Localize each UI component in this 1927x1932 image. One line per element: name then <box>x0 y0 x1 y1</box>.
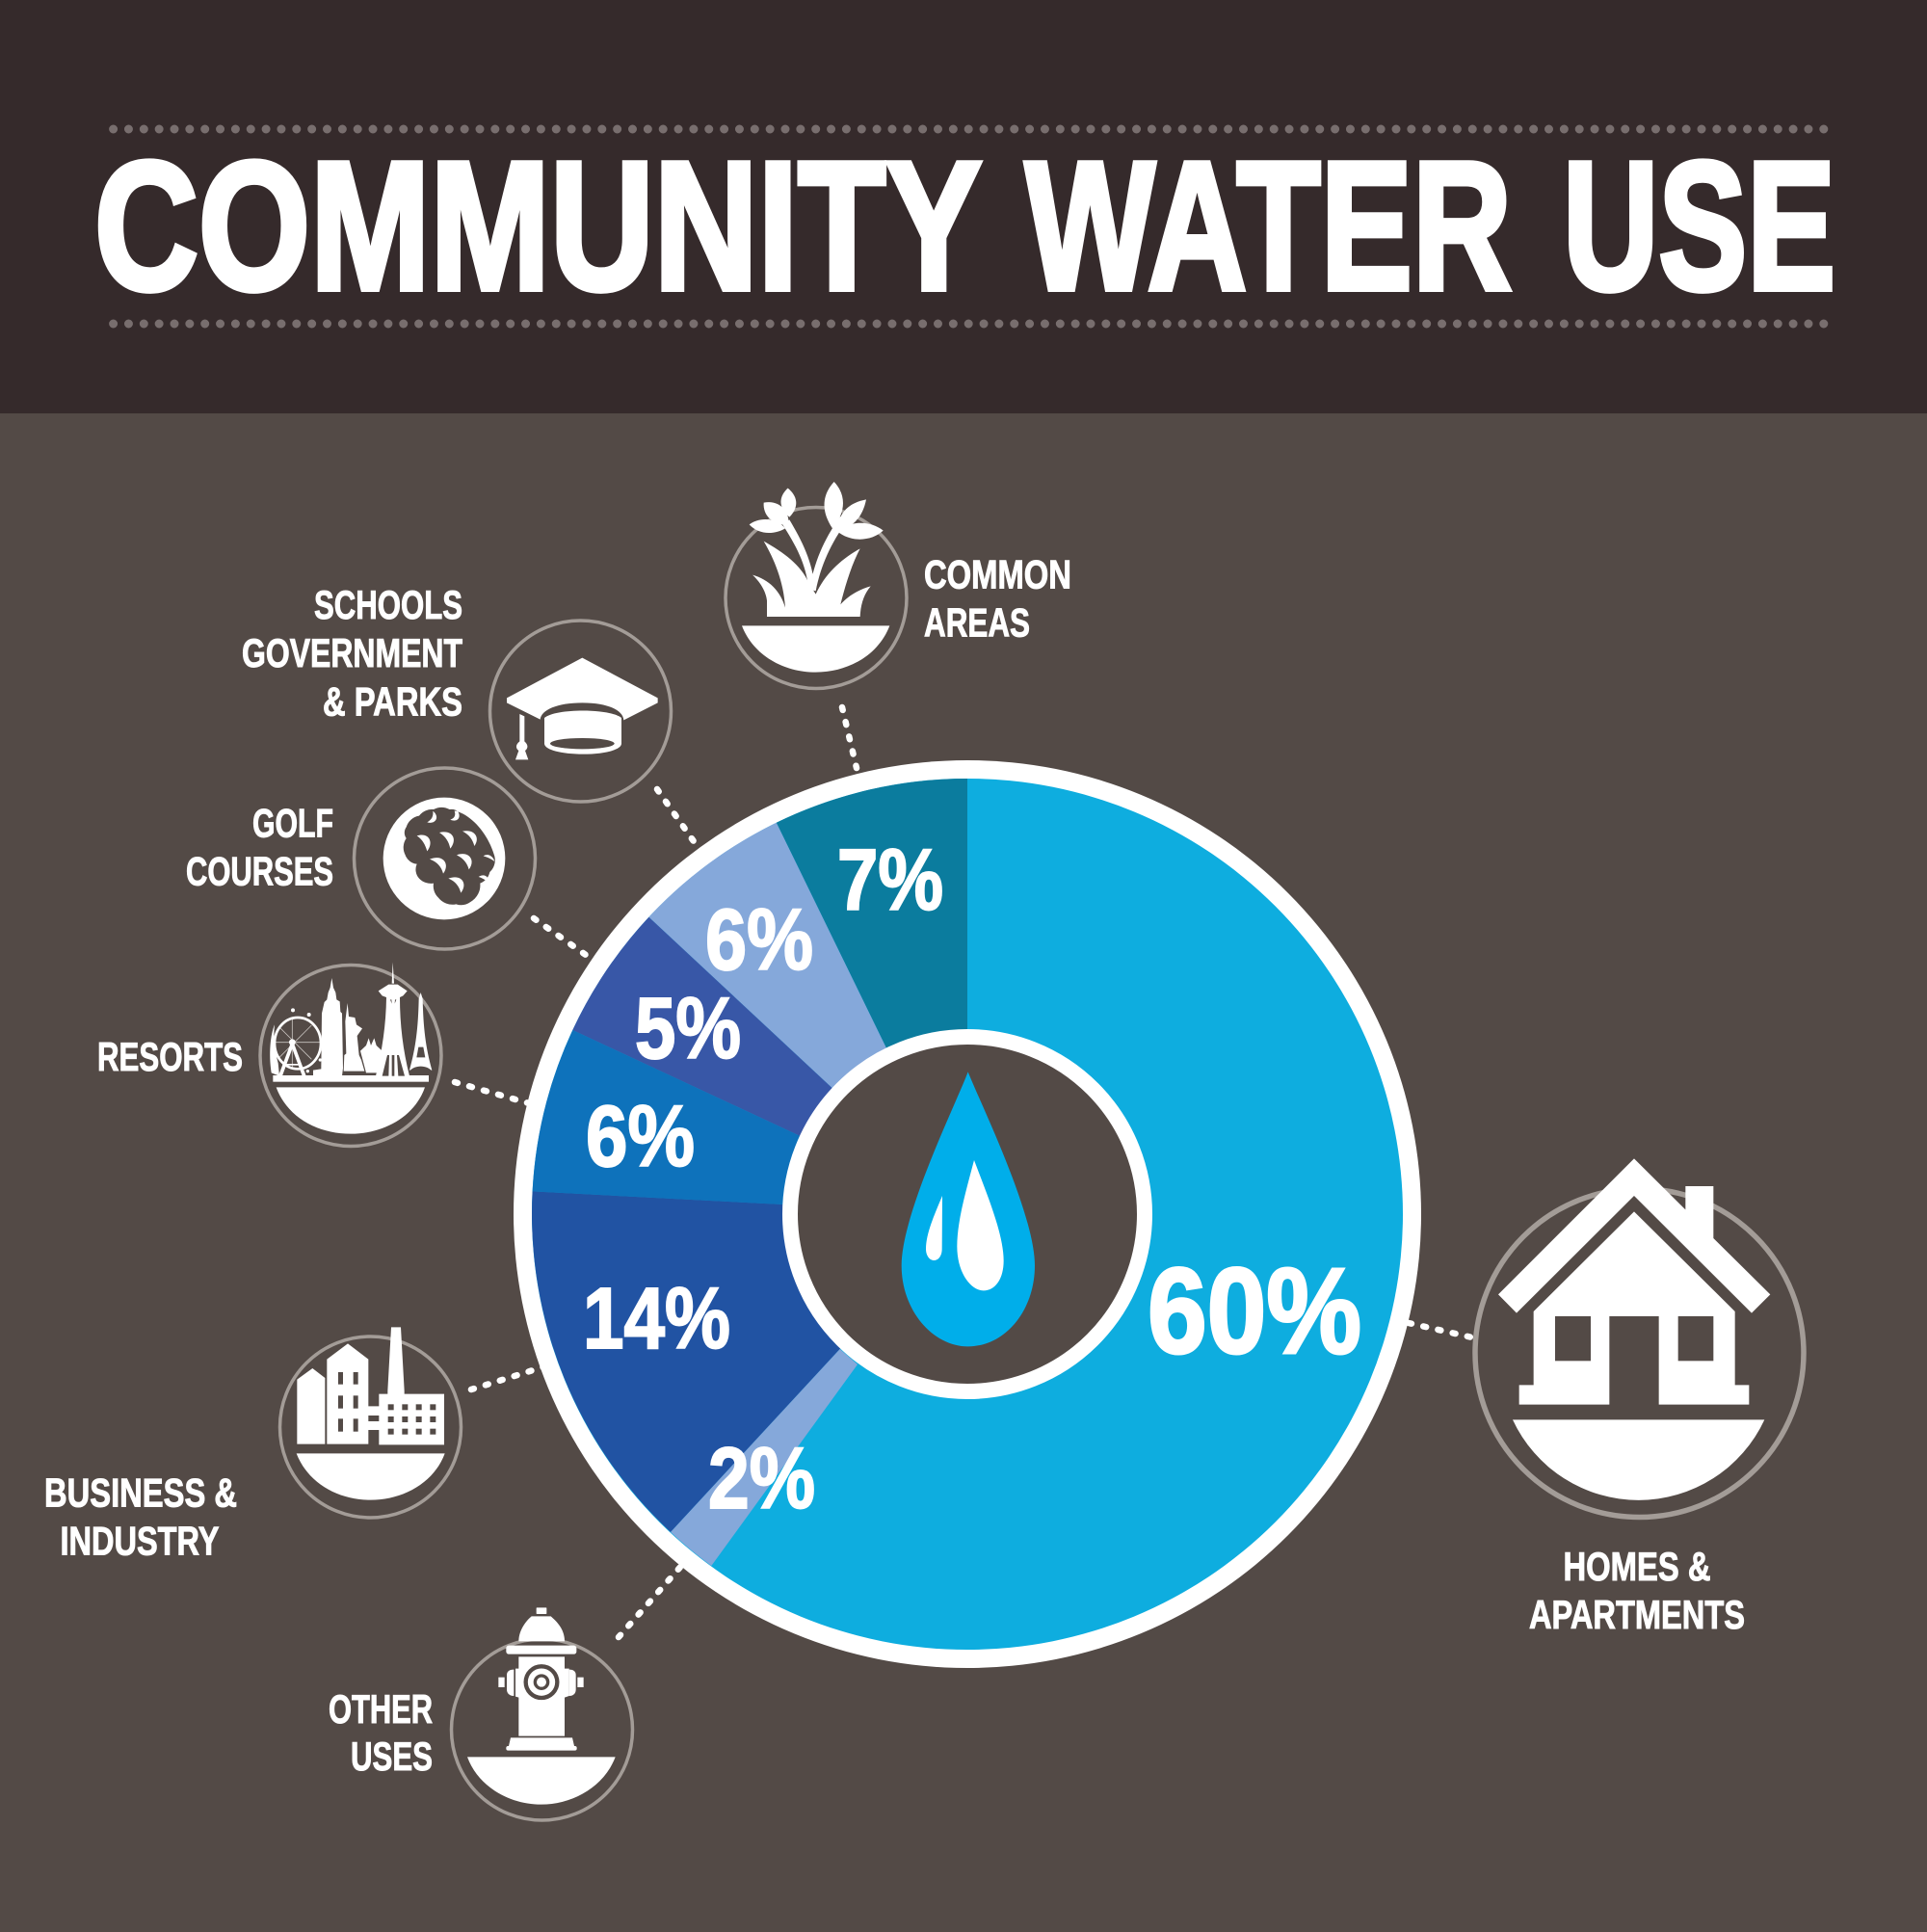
percentages: 6% <box>705 892 813 989</box>
segment: common areas 7% <box>777 779 967 1214</box>
segment: business 14% <box>532 1191 967 1532</box>
label: business and industry <box>44 1470 237 1563</box>
icon: resort skyline <box>260 962 441 1147</box>
icon: graduation cap <box>489 621 671 802</box>
label: schools: & PARKS <box>323 678 462 725</box>
label: other uses: USES <box>351 1734 433 1779</box>
percentages: 60% <box>1148 1243 1361 1379</box>
title: WATER <box>1025 124 1512 329</box>
title <box>94 124 1835 329</box>
icon: house <box>1475 1158 1804 1517</box>
icon: business and industry factory <box>279 1327 461 1518</box>
label: common areas: AREAS <box>924 599 1030 646</box>
percentages <box>583 833 1361 1527</box>
segment: schools 6% <box>648 823 967 1214</box>
percentages: 2% <box>708 1431 815 1527</box>
segment: resorts 6% <box>533 1030 967 1214</box>
percentages: 5% <box>635 981 741 1077</box>
segment: homes 60% <box>532 779 1403 1650</box>
donut chart <box>514 760 1421 1668</box>
icon: water drop <box>902 1072 1035 1346</box>
percentages: 7% <box>837 833 943 929</box>
header band <box>0 0 1927 413</box>
percentages: 6% <box>586 1089 695 1185</box>
label: business and industry: BUSINESS & <box>44 1470 237 1515</box>
title: COMMUNITY <box>94 124 982 329</box>
segment: golf 5% <box>572 917 967 1214</box>
label: business and industry: INDUSTRY <box>60 1519 220 1563</box>
icon: common areas plant <box>726 482 907 688</box>
label: other uses <box>329 1686 433 1779</box>
label: schools: SCHOOLS <box>314 582 462 627</box>
label: homes and apartments <box>1529 1544 1745 1637</box>
dotted connectors <box>455 707 1472 1637</box>
label: schools: GOVERNMENT <box>242 630 462 675</box>
segment: other 2% <box>671 1349 858 1566</box>
label: golf courses: GOLF <box>252 800 333 846</box>
percentages: 14% <box>583 1271 730 1367</box>
label: homes and apartments: APARTMENTS <box>1529 1592 1745 1637</box>
label: golf courses <box>186 800 333 894</box>
label: golf courses: COURSES <box>186 848 333 894</box>
label: common areas: COMMON <box>924 551 1071 597</box>
label: common areas <box>924 551 1071 646</box>
icon: fire hydrant <box>451 1607 632 1820</box>
center hole <box>790 1037 1145 1391</box>
icon: golf ball <box>355 768 536 949</box>
label: resorts: RESORTS <box>97 1034 243 1079</box>
label: schools <box>242 582 462 725</box>
label: other uses: OTHER <box>329 1686 433 1732</box>
label: homes and apartments: HOMES & <box>1563 1544 1711 1589</box>
